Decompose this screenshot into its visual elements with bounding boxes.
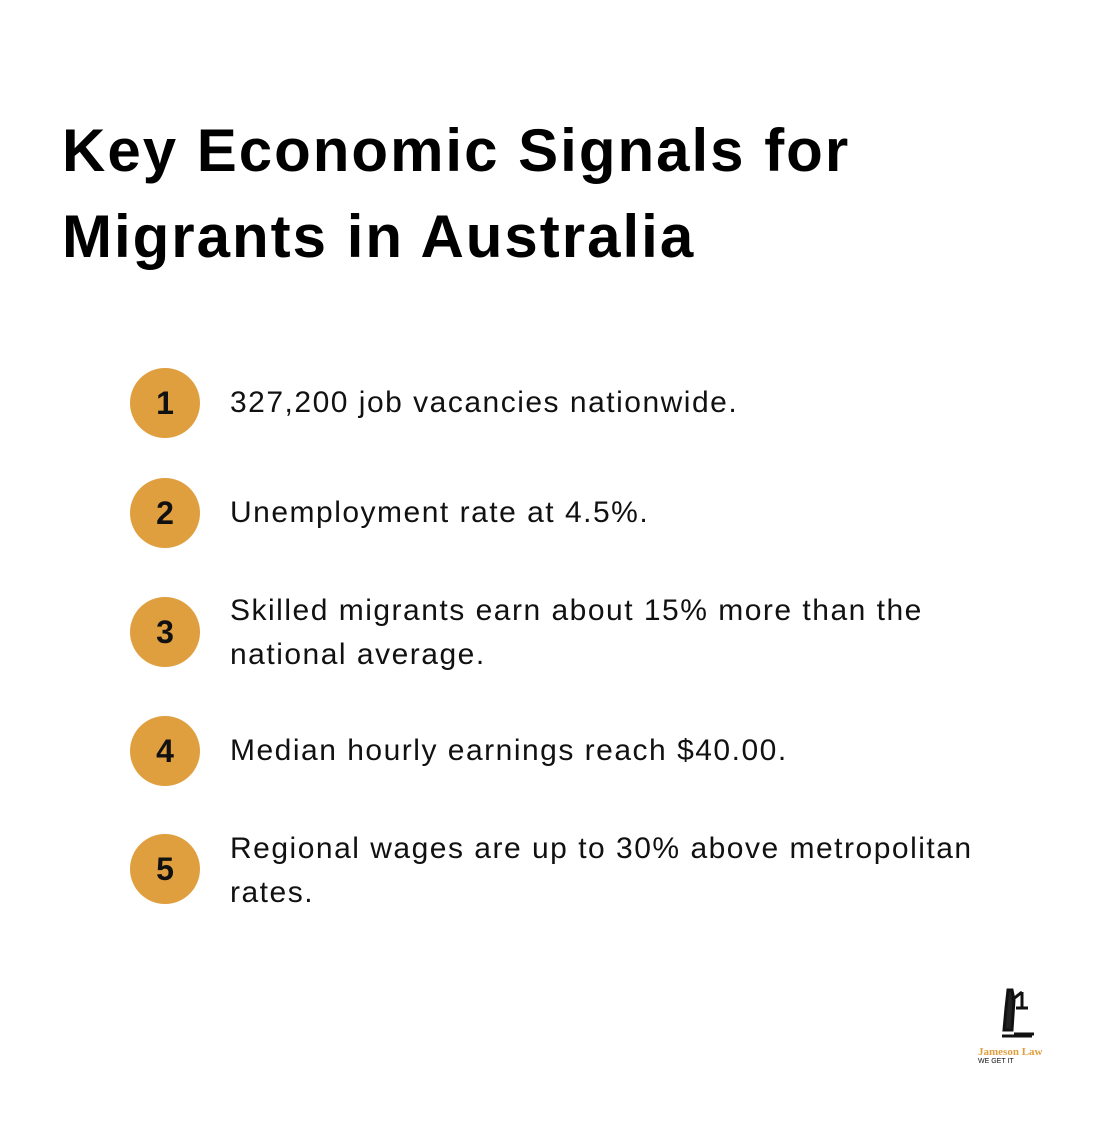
title: Key Economic Signals for <box>62 117 850 184</box>
title: Migrants in Australia <box>62 203 695 270</box>
item 1: 1 <box>156 385 174 421</box>
logo: Jameson Law <box>978 1046 1042 1058</box>
item 5 <box>130 832 973 909</box>
item 1: 327,200 job vacancies nationwide. <box>230 386 738 419</box>
item 5: 5 <box>156 851 174 887</box>
item 5: rates. <box>230 876 314 909</box>
item 4: 4 <box>156 733 174 769</box>
title <box>62 117 850 270</box>
item 3: national average. <box>230 638 486 671</box>
item 2 <box>130 478 649 548</box>
item 2: 2 <box>156 495 174 531</box>
item 1 <box>130 368 738 438</box>
item 4 <box>130 716 788 786</box>
logo: WE GET IT <box>978 1058 1014 1065</box>
item 5: Regional wages are up to 30% above metropolitan <box>230 832 973 865</box>
logo <box>978 988 1042 1065</box>
item 2: Unemployment rate at 4.5%. <box>230 496 649 529</box>
item 4: Median hourly earnings reach $40.00. <box>230 734 788 767</box>
item 3 <box>130 594 923 671</box>
item 3: Skilled migrants earn about 15% more than the <box>230 594 923 627</box>
item 3: 3 <box>156 614 174 650</box>
